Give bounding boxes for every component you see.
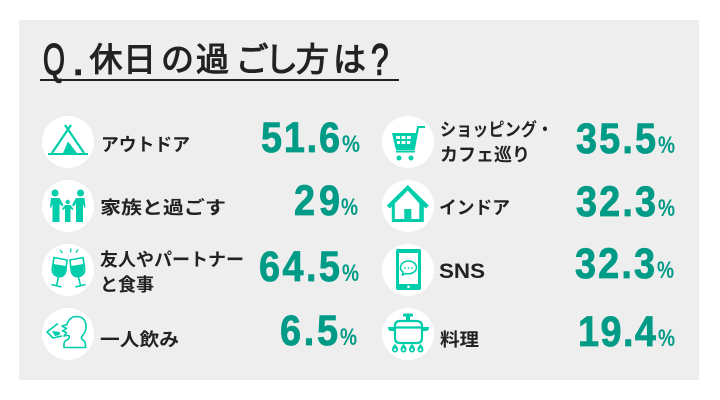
value: 6.5 <box>280 306 338 355</box>
value: 32.3 <box>575 239 655 288</box>
label: インドア <box>439 198 510 218</box>
icon: smartphone <box>382 244 434 296</box>
label: アウトドア <box>101 135 190 155</box>
value: 35.5 <box>576 114 656 163</box>
value: % <box>340 324 357 351</box>
value: 64.5 <box>259 242 340 291</box>
item: shopping <box>382 114 675 168</box>
label: 友人やパートナー <box>100 250 244 270</box>
label: 一人飲み <box>100 330 179 350</box>
item: family <box>42 176 358 232</box>
title: ? <box>371 35 389 85</box>
item: drinks with friends <box>42 242 359 296</box>
value: 29 <box>294 176 340 225</box>
title: Q <box>43 35 65 84</box>
title <box>40 35 399 85</box>
label: ショッピング・ <box>440 119 553 140</box>
value: 51.6 <box>261 113 340 162</box>
label second line: カフェ巡り <box>440 145 530 165</box>
icon: tent <box>42 116 94 168</box>
value: 32.3 <box>576 177 656 226</box>
icon: wine glasses <box>42 244 94 296</box>
title: 休日の過ごし方は <box>90 41 366 78</box>
item: indoor <box>382 177 675 232</box>
label: 料理 <box>440 330 479 350</box>
value: % <box>342 131 360 158</box>
value: 19.4 <box>578 307 656 356</box>
value: % <box>658 195 675 222</box>
value: % <box>657 257 674 284</box>
icon: person drinking <box>42 308 94 360</box>
value: % <box>658 325 675 352</box>
icon: shopping cart <box>382 116 434 168</box>
icon: pot on stove <box>382 308 434 360</box>
value: % <box>341 194 358 221</box>
item: cooking <box>382 307 675 360</box>
item: SNS <box>382 239 674 296</box>
icon: family <box>42 180 94 232</box>
item: drinking alone <box>42 306 357 360</box>
value: % <box>658 132 675 159</box>
title: . <box>74 48 82 82</box>
label: 家族と過ごす <box>100 197 226 218</box>
item: outdoor <box>42 113 360 168</box>
icon: house <box>382 180 434 232</box>
value: % <box>342 260 359 287</box>
label second line: と食事 <box>100 275 154 295</box>
label: SNS <box>439 260 485 283</box>
